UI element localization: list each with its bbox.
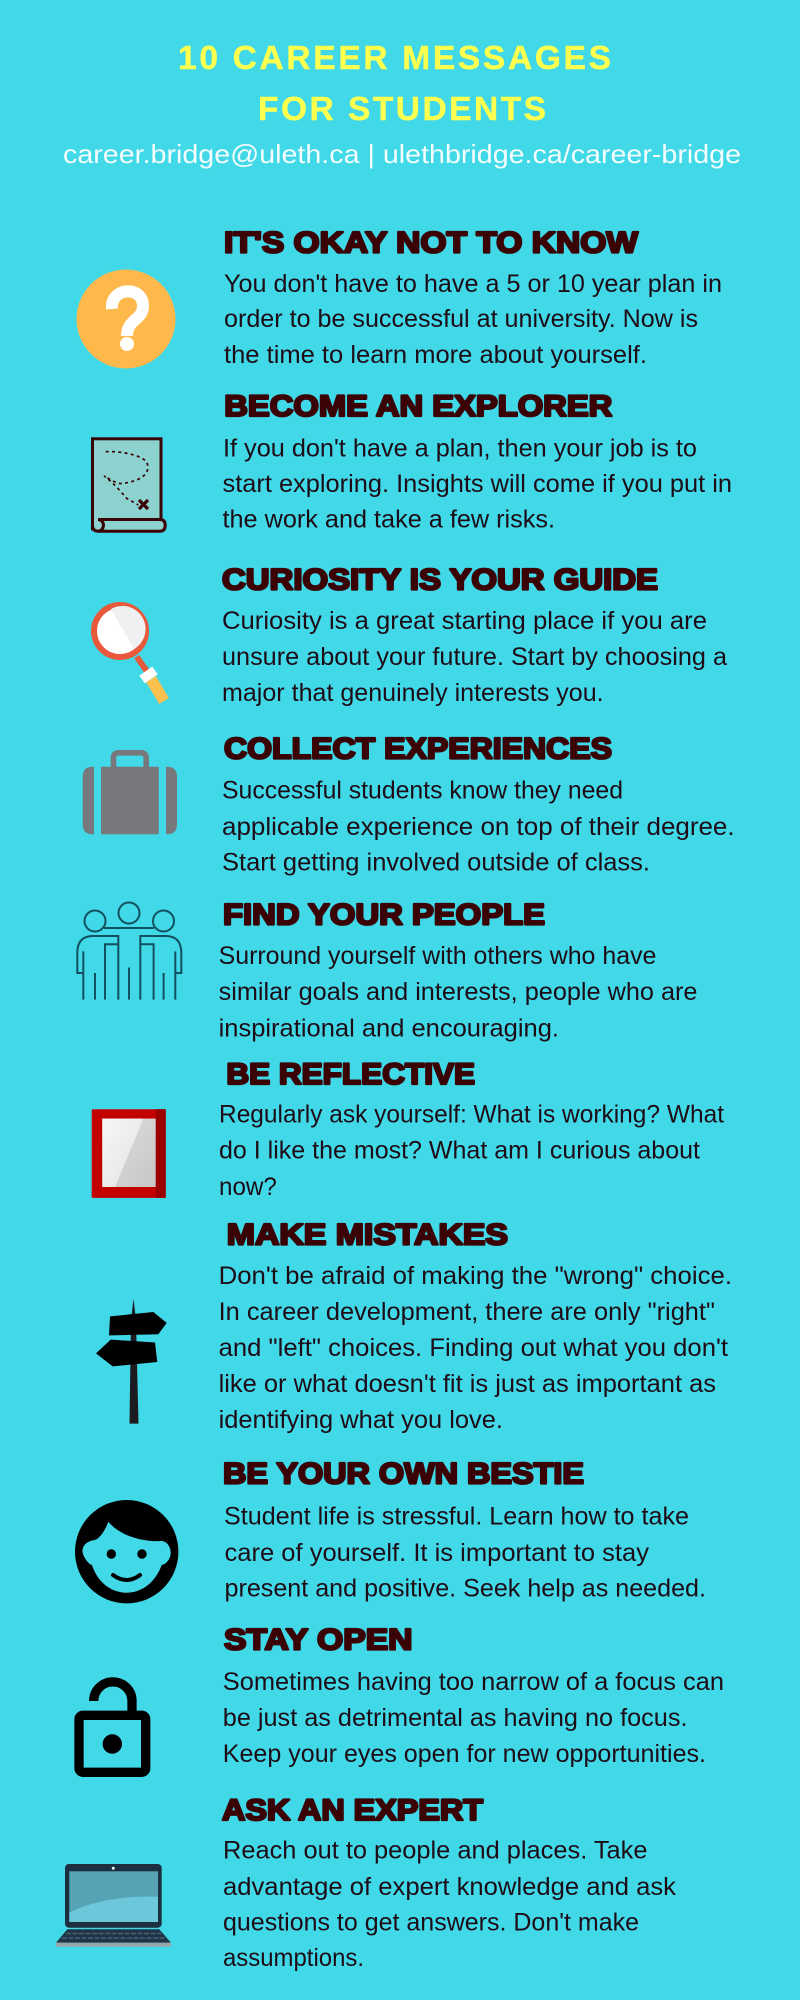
body text: In career development, there are only "right"	[219, 1298, 715, 1326]
icon: question mark	[76, 270, 176, 368]
icon: signpost	[96, 1299, 167, 1424]
heading: ASK AN EXPERT	[222, 1794, 483, 1827]
body text: questions to get answers. Don't make	[223, 1908, 639, 1936]
title	[178, 40, 611, 128]
body text: Sometimes having too narrow of a focus can	[223, 1668, 724, 1696]
panel: find your people	[77, 898, 698, 1042]
body text: Keep your eyes open for new opportunities.	[223, 1740, 706, 1768]
body text: Don't be afraid of making the "wrong" choice.	[219, 1262, 732, 1290]
body text: Reach out to people and places. Take	[223, 1837, 648, 1865]
heading: CURIOSITY IS YOUR GUIDE	[222, 564, 658, 596]
panel: stay open	[79, 1624, 724, 1772]
heading: MAKE MISTAKES	[227, 1218, 508, 1252]
heading: BECOME AN EXPLORER	[224, 390, 612, 423]
body text: the time to learn more about yourself.	[224, 341, 647, 369]
body text	[219, 1262, 732, 1434]
panel: be your own bestie	[75, 1458, 706, 1603]
body text	[222, 777, 735, 877]
panel: make mistakes	[96, 1218, 732, 1434]
title: 10 CAREER MESSAGES	[178, 40, 611, 77]
contact line: career.bridge@uleth.ca | ulethbridge.ca/career-bridge	[63, 139, 741, 169]
body text	[222, 607, 727, 707]
body text: Regularly ask yourself: What is working? What	[219, 1101, 724, 1129]
panel: it's okay not to know	[76, 226, 722, 369]
body text: order to be successful at university. Now is	[224, 305, 698, 333]
body text: assumptions.	[223, 1944, 364, 1972]
body text: similar goals and interests, people who are	[219, 978, 698, 1006]
heading: FIND YOUR PEOPLE	[223, 898, 545, 932]
icon: magnifying glass	[94, 605, 164, 701]
body text: do I like the most? What am I curious about	[219, 1137, 700, 1165]
body text	[219, 1101, 724, 1201]
body text	[224, 1503, 706, 1603]
body text: You don't have to have a 5 or 10 year plan in	[224, 270, 722, 298]
icon: open padlock	[79, 1682, 146, 1772]
body text: like or what doesn't fit is just as important as	[219, 1370, 716, 1398]
icon: smiling face	[75, 1500, 178, 1603]
body text: now?	[219, 1173, 277, 1201]
heading: BE REFLECTIVE	[226, 1058, 475, 1091]
body text: Start getting involved outside of class.	[222, 849, 650, 877]
body text	[219, 942, 698, 1042]
panel: become an explorer	[92, 390, 732, 534]
icon: mirror	[92, 1109, 166, 1198]
icon: treasure map	[92, 439, 165, 531]
body text: inspirational and encouraging.	[219, 1014, 559, 1042]
body text	[223, 1668, 724, 1768]
heading: IT'S OKAY NOT TO KNOW	[224, 226, 638, 260]
body text: major that genuinely interests you.	[222, 679, 604, 707]
body text: the work and take a few risks.	[222, 506, 555, 534]
body text	[222, 435, 732, 534]
heading: STAY OPEN	[224, 1624, 412, 1656]
body text: unsure about your future. Start by choosing a	[222, 643, 727, 671]
panel: ask an expert	[56, 1794, 677, 1972]
icon: briefcase	[83, 753, 177, 834]
body text: care of yourself. It is important to stay	[224, 1539, 649, 1567]
panel: curiosity is your guide	[94, 564, 727, 707]
body text: If you don't have a plan, then your job is to	[223, 435, 697, 463]
body text: applicable experience on top of their degree.	[222, 813, 735, 841]
body text: start exploring. Insights will come if you put in	[222, 470, 732, 498]
icon: laptop	[56, 1864, 171, 1947]
body text	[224, 270, 722, 369]
icon: group of people	[77, 902, 181, 1000]
title: FOR STUDENTS	[258, 91, 546, 128]
heading: BE YOUR OWN BESTIE	[223, 1458, 584, 1490]
body text: Curiosity is a great starting place if you are	[222, 607, 707, 635]
body text	[223, 1837, 677, 1972]
heading: COLLECT EXPERIENCES	[224, 732, 612, 766]
body text: advantage of expert knowledge and ask	[223, 1873, 677, 1901]
body text: present and positive. Seek help as needed.	[224, 1575, 706, 1603]
body text: Surround yourself with others who have	[219, 942, 656, 970]
body text: be just as detrimental as having no focus.	[223, 1704, 688, 1732]
body text: and "left" choices. Finding out what you don't	[219, 1334, 728, 1362]
body text: Successful students know they need	[222, 777, 623, 805]
panel: be reflective	[92, 1058, 724, 1201]
panel: collect experiences	[83, 732, 735, 877]
body text: Student life is stressful. Learn how to take	[224, 1503, 689, 1531]
body text: identifying what you love.	[219, 1406, 503, 1434]
